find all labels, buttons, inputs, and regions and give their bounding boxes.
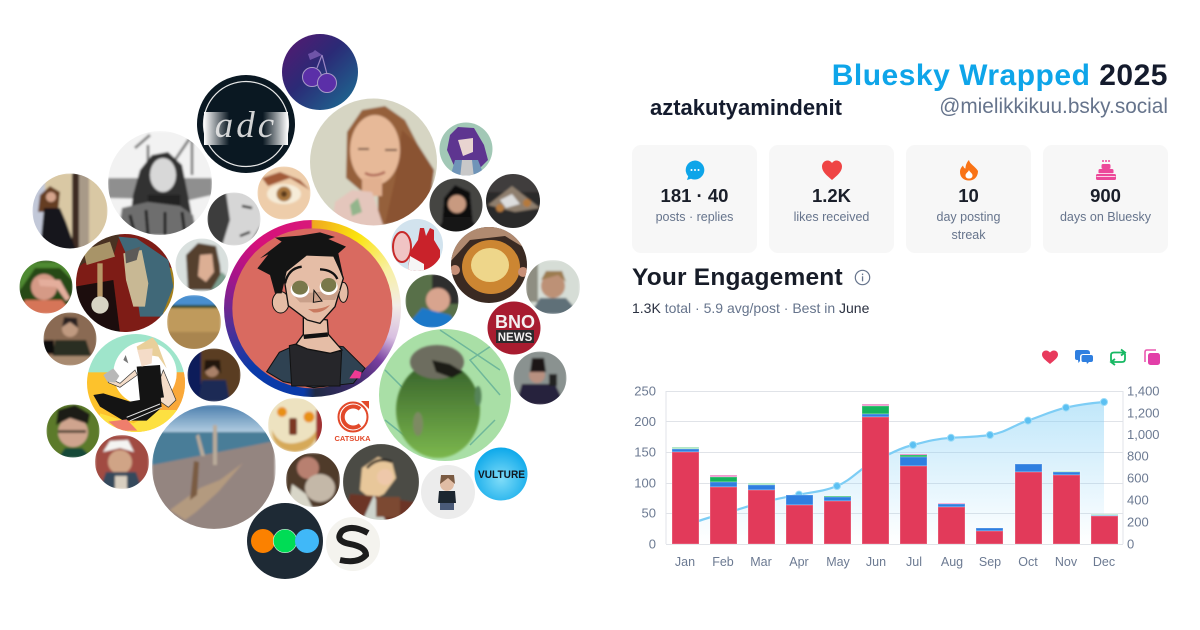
stat card: posts and replies: 181 · 40	[661, 185, 728, 206]
stat card: likes: 1.2K	[812, 185, 851, 206]
avatar: blond man	[526, 260, 580, 314]
left axis labels: 200	[634, 414, 656, 429]
left axis labels	[634, 384, 656, 552]
avatar ring: main profile	[224, 220, 401, 397]
bar: Mar	[748, 483, 775, 544]
stat card: posts and replies: posts · replies	[656, 210, 733, 224]
month labels: Dec	[1093, 555, 1115, 569]
icon: likes	[1042, 350, 1058, 364]
right axis labels: 600	[1127, 470, 1149, 486]
avatar: snake logo	[326, 517, 380, 571]
avatar: seal in water	[378, 328, 512, 462]
month labels: Apr	[789, 555, 809, 569]
avatar: BNO News logo	[488, 302, 540, 354]
avatar: adc logo	[197, 75, 295, 173]
month labels: Jan	[675, 555, 695, 569]
avatar: Catsuka logo: CATSUKA	[334, 434, 371, 443]
avatar: man shading eyes	[19, 260, 73, 314]
bar: Jan	[672, 447, 699, 544]
bar: Sep	[976, 528, 1003, 544]
avatar: BNO News logo: BNO	[495, 312, 535, 332]
avatar: sitting illustrated figure	[87, 334, 185, 432]
stat card: days on Bluesky: days on Bluesky	[1060, 210, 1151, 224]
avatar: wizard painting	[75, 233, 175, 333]
avatar: man with glasses in blue	[405, 274, 459, 328]
right axis labels: 800	[1127, 448, 1149, 464]
icon: reposts	[1111, 350, 1125, 365]
avatar: driftwood beach	[152, 405, 276, 530]
icon: heart	[822, 160, 842, 180]
avatar: woman in black dress	[32, 173, 108, 250]
bar: Dec	[1091, 514, 1118, 544]
avatar: wheat field	[167, 295, 221, 350]
avatar: fried bread	[450, 226, 528, 304]
right axis labels: 0	[1127, 536, 1134, 552]
handle: @mielikkikuu.bsky.social	[939, 95, 1168, 118]
stat card: days on Bluesky: 900	[1090, 185, 1121, 206]
month labels: Oct	[1018, 555, 1038, 569]
month labels: Jul	[906, 555, 922, 569]
avatar: Catsuka logo	[334, 401, 371, 443]
icon: quotes	[1145, 350, 1160, 365]
engagement summary: 1.3K total · 5.9 avg/post · Best in June	[632, 300, 869, 316]
avatar: adc logo: adc	[215, 105, 277, 146]
icon: info	[854, 270, 870, 286]
avatar: black-and-white face	[207, 192, 261, 246]
right axis labels: 200	[1127, 514, 1149, 530]
avatar: BNO News logo: NEWS	[498, 332, 533, 344]
bar: Aug	[938, 503, 965, 544]
avatar: Alice cartoon	[342, 443, 420, 522]
avatar: main cartoon portrait	[232, 228, 392, 388]
bubble cluster of avatars	[20, 34, 580, 579]
left axis labels: 50	[642, 506, 656, 520]
stat card: posts and replies	[632, 145, 757, 253]
month labels: May	[826, 555, 851, 569]
display name: aztakutyamindenit	[650, 95, 842, 120]
left axis labels: 150	[634, 444, 656, 460]
avatar: dark-haired woman with glasses	[430, 178, 482, 232]
month labels: Feb	[712, 555, 734, 569]
grid lines	[666, 391, 1123, 544]
avatar: man with glasses, green background	[46, 404, 100, 458]
left axis labels: 0	[649, 536, 656, 552]
bar: Oct	[1015, 464, 1042, 544]
right axis labels: 1,400	[1127, 384, 1160, 398]
bar: May	[824, 496, 851, 544]
left axis labels: 250	[634, 384, 656, 398]
area under cumulative line	[684, 402, 1104, 544]
icon: replies	[1075, 350, 1093, 364]
avatar: cherries	[280, 32, 360, 112]
avatar: chibi figure	[420, 464, 476, 520]
right axis labels: 1,000	[1127, 427, 1160, 442]
icon: chat bubble	[686, 160, 704, 180]
bar: Apr	[786, 495, 813, 544]
icon: cake	[1096, 160, 1116, 180]
avatar: dark artwork	[486, 174, 540, 228]
left axis labels: 100	[634, 476, 656, 490]
stat card: streak: day posting	[937, 210, 1000, 224]
avatar: egg face breakfast	[268, 398, 324, 452]
right axis labels: 400	[1127, 492, 1149, 508]
avatar: man holding cat	[286, 453, 340, 507]
icon: flame	[960, 160, 978, 180]
avatar: Vulture logo	[474, 448, 528, 500]
avatar: woman with brown hair	[175, 238, 230, 292]
month labels: Nov	[1055, 555, 1078, 569]
month labels: Aug	[941, 555, 963, 569]
avatar: man speaking	[43, 312, 97, 366]
avatar: man in white cap	[95, 435, 149, 489]
stat card: days on Bluesky	[1043, 145, 1168, 253]
month labels: Mar	[750, 555, 772, 569]
avatar: three circles logo	[247, 503, 323, 579]
avatar: black-and-white woman	[108, 131, 212, 235]
line points	[796, 398, 1108, 498]
right axis labels: 1,200	[1127, 406, 1160, 420]
bar: Jul	[900, 454, 927, 544]
bar: Jun	[862, 404, 889, 544]
bar: Nov	[1053, 471, 1080, 544]
combined bar and line chart	[634, 384, 1160, 569]
avatar: selfie woman	[513, 351, 567, 405]
heading: Your Engagement: Your Engagement	[632, 264, 843, 291]
avatar: purple-haired anime	[440, 122, 492, 176]
avatar: red robot heart	[390, 218, 444, 272]
stat card: likes	[769, 145, 894, 253]
avatar: man in dark suit	[187, 348, 241, 402]
stat card: streak: 10	[958, 185, 979, 206]
stacked bars	[672, 404, 1118, 544]
avatar: painted eye	[257, 166, 311, 220]
avatar: red-haired woman	[310, 98, 437, 226]
month labels	[675, 555, 1115, 569]
stat card: streak	[906, 145, 1031, 253]
month labels: Sep	[979, 555, 1001, 569]
month labels: Jun	[866, 555, 886, 569]
chart legend	[1042, 348, 1160, 366]
stat card: streak: streak	[951, 228, 986, 242]
bar: Feb	[710, 475, 737, 544]
avatar: Vulture logo: VULTURE	[478, 469, 525, 481]
title: Bluesky Wrapped 2025	[832, 59, 1168, 92]
stat card: likes: likes received	[794, 210, 869, 224]
cumulative line	[684, 402, 1104, 526]
right axis labels	[1127, 384, 1160, 552]
